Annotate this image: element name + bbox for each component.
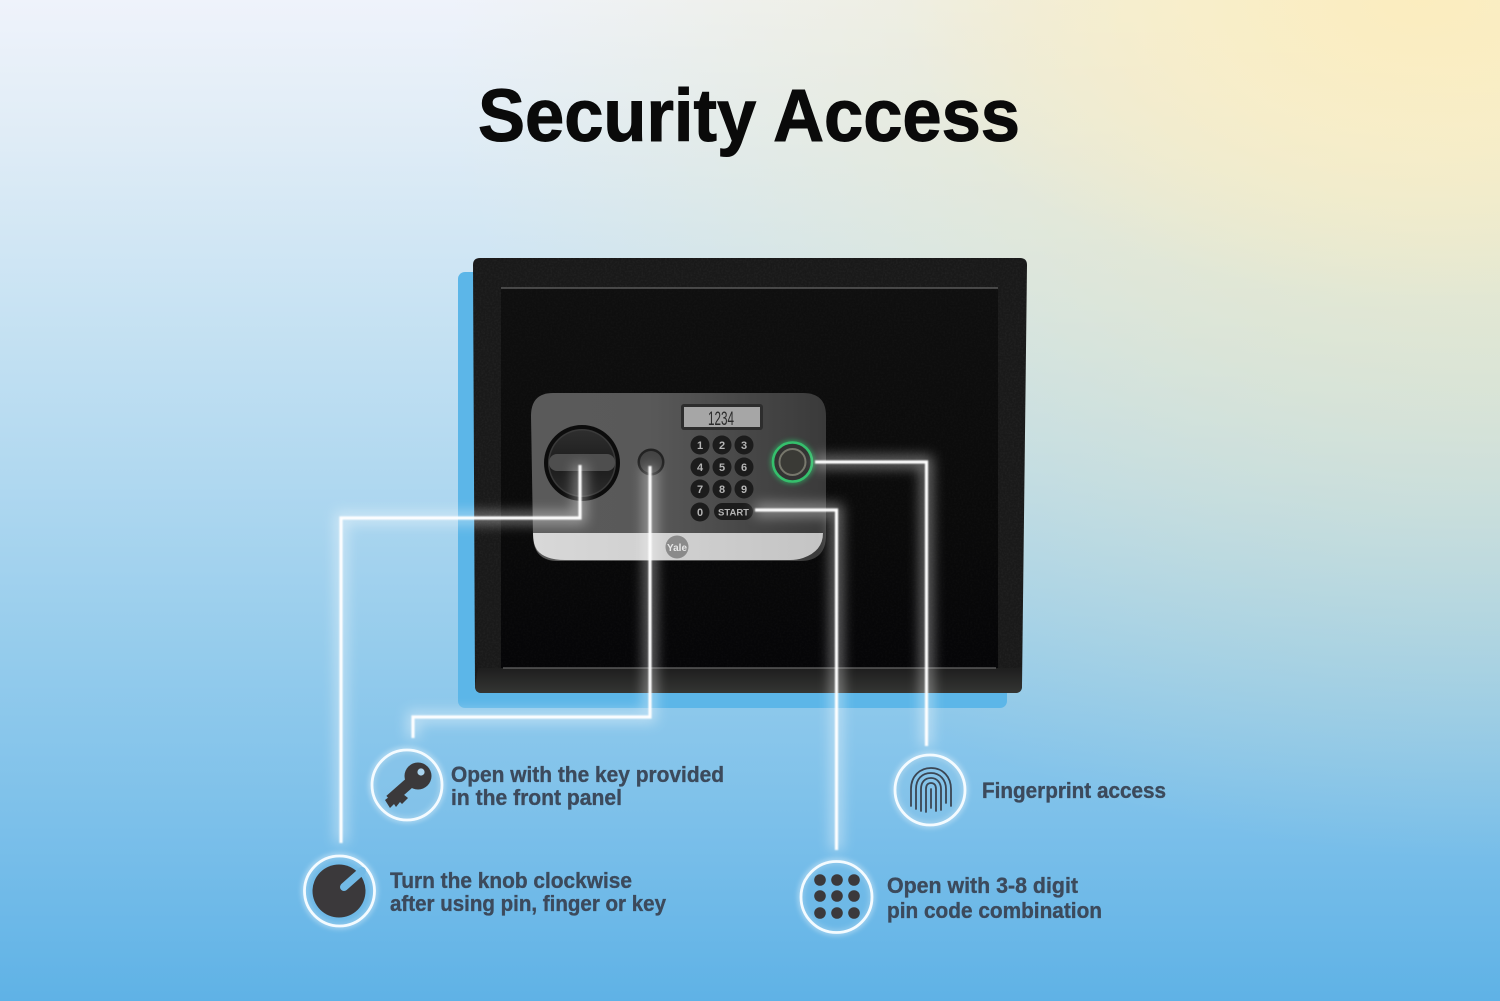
keypad: 8 [719,484,725,496]
safe body [473,258,1027,693]
keypad: 3 [741,440,747,452]
text: fingerprint: Fingerprint access [982,778,1166,803]
connector: pin code [755,510,836,850]
callout: pin code [801,862,1102,932]
Yale logo: Yale [667,543,687,554]
title: Security Access [478,74,1020,157]
safe [458,258,1027,708]
keypad [690,436,754,522]
text: key [451,762,724,810]
connector: fingerprint [815,462,926,746]
text: knob: Turn the knob clockwise [390,868,632,893]
keypad: 1 [697,440,703,452]
key lock [638,448,664,476]
safe shadow [458,272,1007,708]
safe inner texture [501,288,998,668]
keypad: START [718,508,749,518]
text: knob: after using pin, finger or key [390,891,667,916]
icon: knob [304,856,374,926]
text: key: in the front panel [451,785,622,810]
keypad: 2 [719,440,725,452]
keypad: 9 [741,484,747,496]
safe inner edges [501,288,998,668]
keypad: 0 [697,507,703,519]
knob [544,425,620,501]
keypad: 4 [697,462,704,474]
display: 1234 [708,409,734,430]
safe bottom band [475,668,1022,693]
text: pin code: Open with 3-8 digit [887,873,1079,898]
callout: fingerprint [895,755,1166,825]
text: pin code [887,873,1102,923]
keypad: 6 [741,462,747,474]
connector glows [341,462,926,850]
icon: key [372,750,442,820]
fingerprint sensor [773,442,812,482]
icon: fingerprint [895,755,965,825]
keypad: 5 [719,462,725,474]
callout: key [372,750,724,820]
text: pin code: pin code combination [887,898,1102,923]
display [681,404,763,430]
connector: key [413,466,650,738]
lock panel [531,393,826,561]
text: key: Open with the key provided [451,762,724,787]
Yale logo [666,536,688,558]
text: knob [390,868,667,916]
icon: keypad dots [801,862,872,932]
plate [531,393,826,561]
connector: knob [341,465,580,843]
callout: knob [304,856,667,926]
safe texture [473,258,1027,693]
light strip [533,533,823,560]
keypad: 7 [697,484,703,496]
safe inner door [501,288,998,668]
